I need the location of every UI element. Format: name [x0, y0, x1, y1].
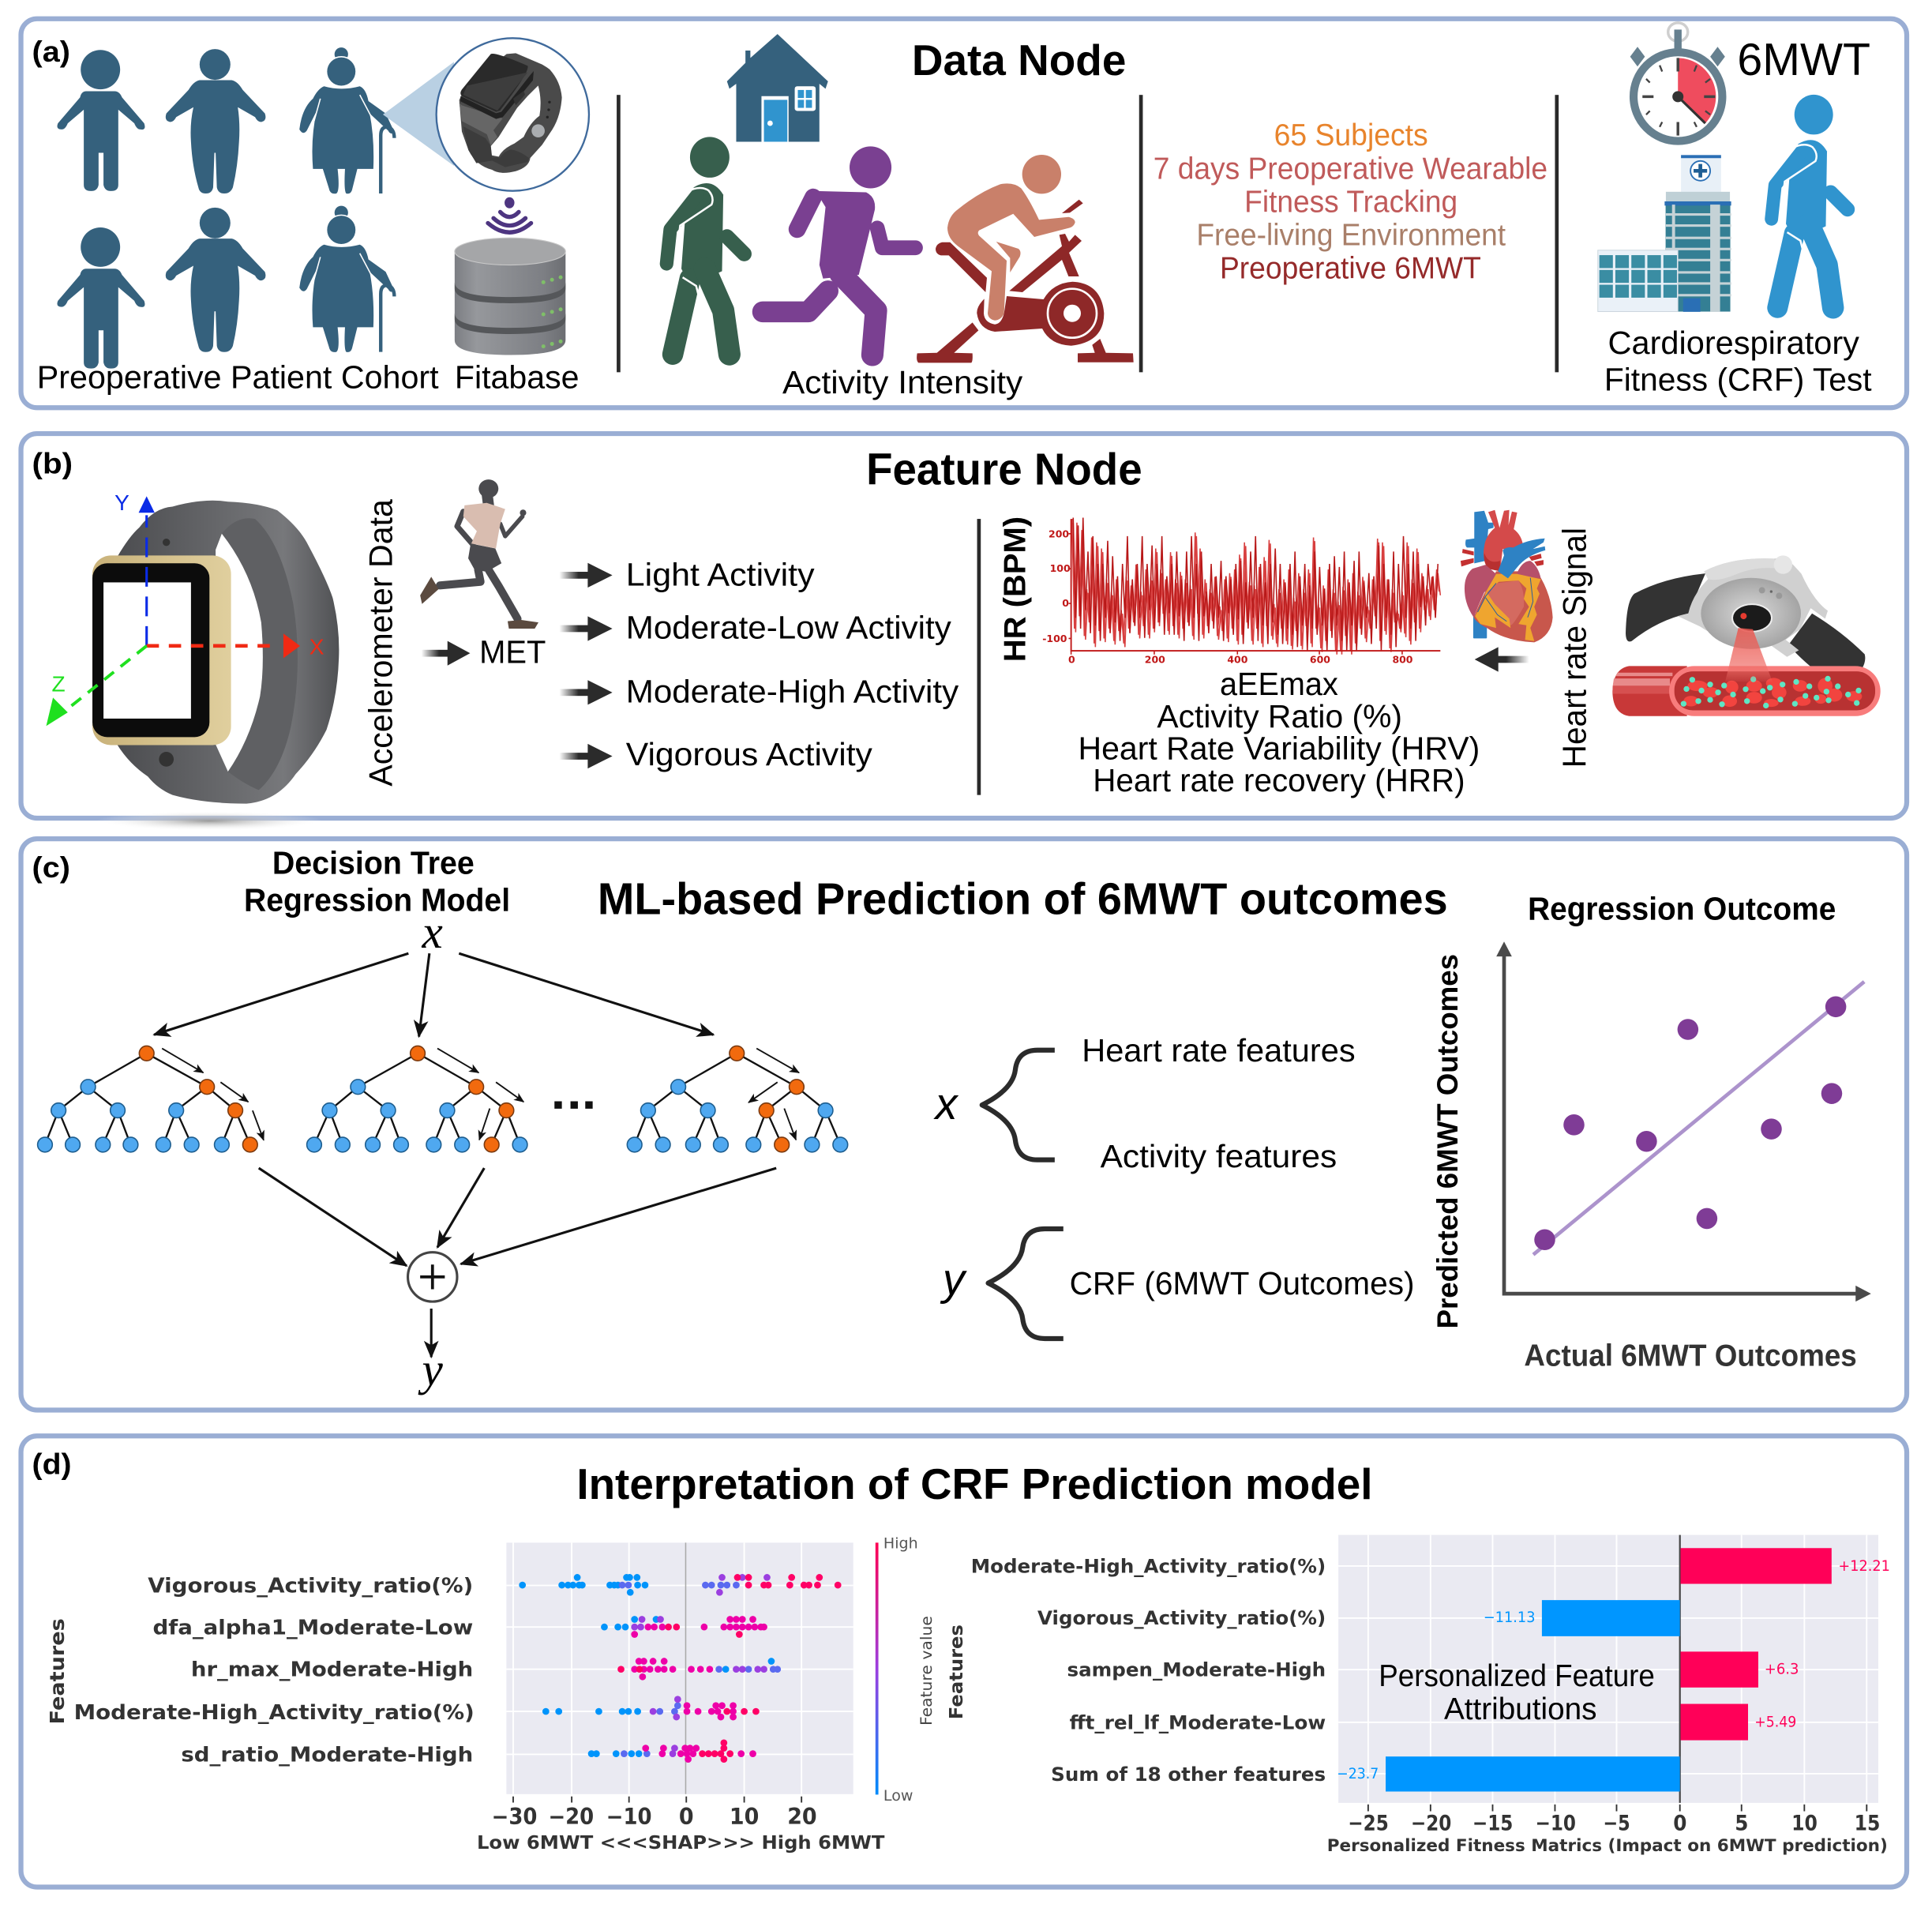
chart: heart rate signal: 200: [1049, 528, 1069, 539]
ticks and tick labels: swarm x axis: 10: [730, 1804, 759, 1830]
divider left: [617, 95, 621, 372]
panel b: feature node: [21, 434, 1907, 831]
chart: heart rate signal: 200: [1145, 654, 1165, 666]
x feature brace group: x: [932, 1079, 958, 1129]
feature labels: waterfall: fft_rel_lf_Moderate-Low: [1070, 1712, 1326, 1734]
arrow to vigorous activity: [560, 744, 613, 768]
annotation: personalized feature attributions: Personalized Feature: [1379, 1659, 1655, 1693]
arrow to moderate-low activity: [560, 616, 613, 641]
ticks and tick labels: waterfall x axis: −5: [1603, 1812, 1630, 1836]
arrow to y output: [430, 1309, 432, 1357]
ticks and tick labels: waterfall x axis: −15: [1472, 1812, 1513, 1836]
heading: regression outcome: Regression Outcome: [1528, 890, 1836, 926]
panel a border: [21, 19, 1907, 408]
text block: study summary: [1154, 118, 1547, 286]
panel d border: [21, 1436, 1907, 1887]
chart: personalized waterfall bars: +6.3: [1765, 1661, 1799, 1677]
chart: heart rate signal: 0: [1068, 654, 1075, 666]
icon: wireless signal: [488, 197, 531, 232]
feature labels: swarm: Vigorous_Activity_ratio(%): [148, 1574, 473, 1598]
chart: personalized waterfall bars: +12.21: [1838, 1558, 1890, 1575]
sum node: [408, 1253, 457, 1301]
icon: smartwatch with axes: Z: [52, 672, 66, 697]
icon: CRF test walker: [1772, 95, 1848, 308]
x feature brace group: Heart rate features: [1082, 1032, 1356, 1069]
icon: wearable callout: [383, 38, 589, 191]
chart: personalized waterfall bars: −23.7: [1337, 1766, 1379, 1782]
label: accelerometer data: Accelerometer Data: [362, 499, 399, 787]
label: vigorous activity: Vigorous Activity: [626, 736, 873, 772]
feature labels: waterfall: Vigorous_Activity_ratio(%): [1037, 1607, 1326, 1629]
ticks and tick labels: swarm x axis: −30: [492, 1804, 537, 1830]
icon: smartwatch with axes: Y: [114, 490, 129, 515]
arrow from heart rate signal: [1475, 647, 1529, 672]
ticks and tick labels: swarm x axis: 20: [787, 1804, 817, 1830]
ticks and tick labels: waterfall x axis: 10: [1791, 1812, 1818, 1836]
ticks and tick labels: waterfall x axis: −10: [1535, 1812, 1576, 1836]
chart: heart rate signal: [1042, 518, 1440, 666]
diagram: decision tree 1: [38, 1046, 264, 1152]
ticks and tick labels: swarm x axis: −10: [606, 1804, 652, 1830]
ticks and tick labels: waterfall x axis: 5: [1735, 1812, 1748, 1836]
feature labels: swarm: hr_max_Moderate-High: [191, 1658, 473, 1682]
text block: features: aEEmax: [1220, 666, 1338, 702]
legend: feature value colour bar: Feature value: [917, 1616, 936, 1726]
icon: database: [455, 238, 565, 355]
chart: heart rate signal: -100: [1042, 633, 1067, 644]
icon: stopwatch: [1630, 23, 1725, 141]
icon: runner: [420, 479, 538, 629]
chart: personalized waterfall bars: [1337, 1535, 1890, 1803]
feature labels: waterfall: [971, 1555, 1326, 1786]
text block: features: Heart rate recovery (HRR): [1093, 762, 1465, 798]
axis label: actual: Actual 6MWT Outcomes: [1524, 1339, 1857, 1373]
label: activity intensity: Activity Intensity: [782, 364, 1023, 400]
chart: heart rate signal: 600: [1310, 654, 1330, 666]
panel d: interpretation: [21, 1436, 1907, 1887]
y target brace group: y: [940, 1254, 967, 1304]
legend: feature value colour bar: Low: [883, 1788, 913, 1805]
panel c letter: (c): [32, 851, 70, 884]
symbol: x input: x: [422, 906, 443, 958]
ticks and tick labels: waterfall x axis: −25: [1348, 1812, 1389, 1836]
legend: feature value colour bar: [876, 1535, 936, 1805]
chart: personalized waterfall bars: +5.49: [1754, 1715, 1796, 1731]
label: fitabase: Fitabase: [455, 359, 579, 396]
heading: ML-based prediction: ML-based Prediction of 6MWT outcomes: [598, 873, 1448, 923]
axis label: features swarm: Features: [46, 1618, 69, 1724]
label: moderate-high activity: Moderate-High Activity: [626, 674, 959, 710]
chart: heart rate signal: 0: [1062, 597, 1069, 609]
text block: features: Activity Ratio (%): [1157, 698, 1402, 734]
icon: running figure: [763, 146, 916, 355]
text block: features: [1079, 666, 1480, 798]
axis label: SHAP: Low 6MWT <<<SHAP>>> High 6MWT: [477, 1831, 885, 1854]
axis label: features waterfall: Features: [945, 1624, 967, 1719]
divider right: [1555, 95, 1559, 372]
ticks and tick labels: swarm x axis: [492, 1797, 817, 1830]
arrow to MET: [422, 641, 470, 666]
diagram: decision tree 2: [307, 1046, 527, 1152]
axis label: personalized fitness metrics: Personalized Fitness Matrics (Impact on 6MWT prediction): [1327, 1835, 1888, 1855]
divider: [977, 519, 981, 795]
icons: patient cohort: [57, 47, 394, 369]
arrow to moderate-high activity: [560, 680, 613, 704]
x feature brace group: Activity features: [1101, 1138, 1337, 1174]
panel c border: [21, 839, 1907, 1410]
arrows into sum node: [259, 1168, 776, 1266]
chart: heart rate signal: 800: [1392, 654, 1413, 666]
icon: smartwatch with axes: [47, 490, 339, 831]
label: MET: MET: [479, 634, 546, 670]
ticks and tick labels: waterfall x axis: [1348, 1805, 1880, 1836]
text block: study summary: 65 Subjects: [1274, 118, 1428, 152]
annotation: personalized feature attributions: Attributions: [1444, 1692, 1597, 1726]
icon: walking figure: [666, 137, 745, 355]
x feature brace group: [932, 1032, 1356, 1174]
symbol: y output: y: [418, 1343, 443, 1395]
panel b border: [21, 434, 1907, 818]
panel c: ML prediction: [21, 839, 1907, 1410]
label: CRF test: Cardiorespiratory: [1608, 325, 1860, 361]
heading: data node: Data Node: [912, 36, 1126, 85]
text block: study summary: 7 days Preoperative Wearable: [1154, 152, 1547, 186]
divider middle: [1139, 95, 1142, 372]
panel d letter: (d): [32, 1448, 72, 1481]
ellipsis between trees: [554, 1102, 593, 1109]
ticks and tick labels: waterfall x axis: −20: [1411, 1812, 1451, 1836]
axis label: HR (BPM): HR (BPM): [998, 516, 1032, 662]
feature labels: swarm: [74, 1574, 475, 1767]
chart: personalized waterfall bars: −11.13: [1484, 1609, 1535, 1626]
chart: SHAP swarm plot: [506, 1542, 853, 1794]
ticks and tick labels: swarm x axis: 0: [679, 1804, 694, 1830]
panel b letter: (b): [32, 446, 73, 479]
heading: interpretation: Interpretation of CRF Prediction model: [576, 1460, 1372, 1508]
text block: study summary: Preoperative 6MWT: [1220, 252, 1481, 286]
arrows from x to trees: [154, 953, 714, 1037]
ticks and tick labels: waterfall x axis: 15: [1855, 1812, 1880, 1836]
icon: cycling figure: [917, 155, 1134, 362]
icon: heart: [1461, 510, 1553, 642]
feature labels: swarm: Moderate-High_Activity_ratio(%): [74, 1701, 475, 1725]
label: light activity: Light Activity: [626, 556, 815, 592]
annotation: personalized feature attributions: [1379, 1659, 1655, 1726]
icon: smartwatch with axes: X: [309, 635, 325, 659]
diagram: decision tree 3: [627, 1046, 848, 1152]
label: CRF test: Fitness (CRF) Test: [1604, 362, 1872, 398]
icon: hospital: [1598, 155, 1731, 312]
icon: home: [727, 34, 828, 141]
label: patient cohort: Preoperative Patient Cohort: [37, 359, 439, 396]
icon: optical heart rate sensor over blood vessel: [1612, 555, 1881, 716]
chart: regression scatter: [1496, 941, 1871, 1301]
panel a: data node: [21, 19, 1907, 408]
text block: study summary: Fitness Tracking: [1244, 185, 1457, 219]
arrow to light activity: [560, 563, 613, 588]
chart: heart rate signal: 400: [1227, 654, 1248, 666]
label: CRF test: [1604, 325, 1872, 398]
y target brace group: CRF (6MWT Outcomes): [1070, 1265, 1415, 1301]
ticks and tick labels: swarm x axis: −20: [548, 1804, 594, 1830]
feature labels: waterfall: Sum of 18 other features: [1051, 1763, 1326, 1786]
text block: features: Heart Rate Variability (HRV): [1079, 730, 1480, 766]
heading: feature node: Feature Node: [866, 444, 1142, 494]
y target brace group: [940, 1229, 1415, 1339]
feature labels: swarm: dfa_alpha1_Moderate-Low: [153, 1617, 473, 1640]
heading: decision tree regression model: Regression Model: [244, 881, 510, 918]
label: moderate-low activity: Moderate-Low Activity: [626, 609, 952, 645]
heading: decision tree regression model: Decision Tree: [272, 845, 475, 881]
feature labels: waterfall: Moderate-High_Activity_ratio(%): [971, 1555, 1326, 1577]
text block: study summary: Free-living Environment: [1196, 219, 1506, 253]
ticks and tick labels: waterfall x axis: 0: [1673, 1812, 1686, 1836]
label: heart rate signal: Heart rate Signal: [1555, 528, 1592, 768]
feature labels: swarm: sd_ratio_Moderate-High: [181, 1743, 473, 1767]
label: 6MWT: 6MWT: [1737, 35, 1870, 85]
panel a letter: (a): [32, 35, 70, 68]
heading: decision tree regression model: [244, 845, 510, 918]
axis label: predicted: Predicted 6MWT Outcomes: [1431, 954, 1464, 1328]
legend: feature value colour bar: High: [883, 1535, 918, 1552]
feature labels: waterfall: sampen_Moderate-High: [1067, 1659, 1326, 1681]
chart: heart rate signal: 100: [1050, 562, 1071, 574]
